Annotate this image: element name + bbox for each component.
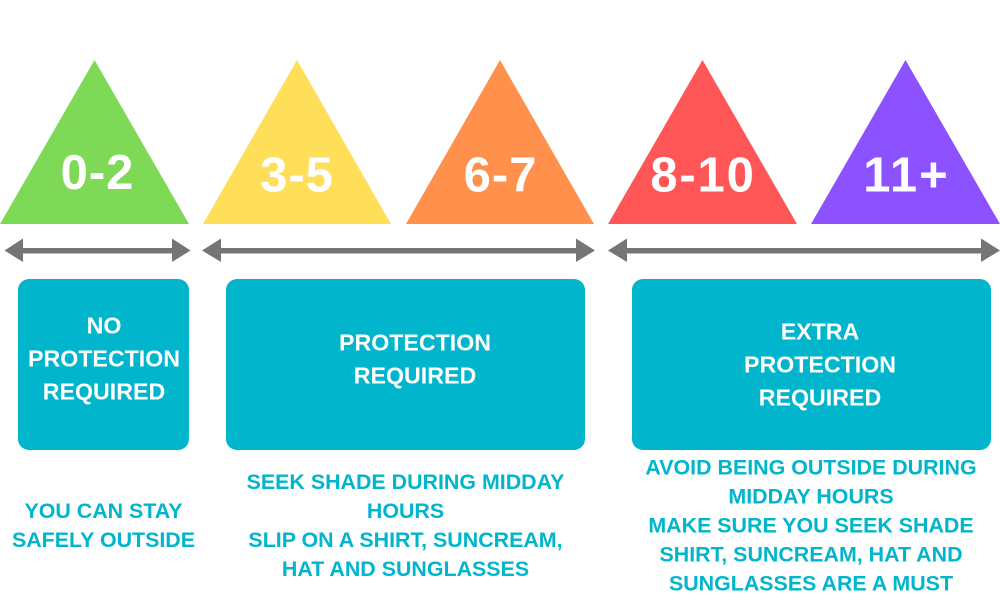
panel: extra protection required: REQUIRED bbox=[759, 384, 881, 410]
panel: no protection required: PROTECTION bbox=[28, 345, 180, 371]
text: advice for moderate UV bbox=[247, 470, 564, 581]
triangle: UV 11+ bbox=[811, 60, 1000, 224]
text: advice for low UV: SAFELY OUTSIDE bbox=[12, 528, 195, 552]
arrow: range 3-7 bbox=[202, 238, 595, 262]
arrow: range 0-2 bbox=[4, 238, 190, 262]
text: advice for high UV: SHIRT, SUNCREAM, HAT AND bbox=[659, 542, 963, 566]
text: advice for high UV bbox=[645, 456, 977, 596]
triangle: UV 8-10 bbox=[608, 60, 797, 224]
text: advice for low UV bbox=[12, 499, 195, 552]
arrow: range 8-11+ bbox=[608, 238, 1000, 262]
text: advice for high UV: MIDDAY HOURS bbox=[728, 484, 894, 508]
panel: protection required: REQUIRED bbox=[354, 362, 476, 388]
text: advice for moderate UV: HAT AND SUNGLASSES bbox=[282, 557, 529, 581]
text: advice for moderate UV: SEEK SHADE DURING MIDDAY bbox=[247, 470, 564, 494]
text: advice for moderate UV: SLIP ON A SHIRT, SUNCREAM, bbox=[248, 528, 563, 552]
triangle: UV 3-5: 3-5 bbox=[260, 148, 334, 202]
triangle: UV 11+: 11+ bbox=[863, 148, 950, 202]
text: advice for high UV: MAKE SURE YOU SEEK SHADE bbox=[648, 514, 974, 538]
text: advice for moderate UV: HOURS bbox=[367, 499, 444, 523]
triangle: UV 3-5 bbox=[203, 60, 391, 224]
panel: no protection required: REQUIRED bbox=[43, 378, 165, 404]
triangle: UV 6-7: 6-7 bbox=[464, 148, 537, 202]
text: advice for high UV: AVOID BEING OUTSIDE DURING bbox=[645, 456, 977, 480]
triangle: UV 8-10: 8-10 bbox=[650, 148, 756, 202]
text: advice for high UV: SUNGLASSES ARE A MUST bbox=[669, 572, 953, 596]
panel: extra protection required: EXTRA bbox=[781, 318, 860, 344]
panel: no protection required: NO bbox=[87, 312, 121, 338]
panel: protection required bbox=[226, 279, 585, 450]
panel: extra protection required: PROTECTION bbox=[744, 351, 896, 377]
triangle: UV 0-2: 0-2 bbox=[61, 146, 134, 200]
panel: protection required: PROTECTION bbox=[339, 329, 491, 355]
panel: extra protection required bbox=[632, 279, 991, 450]
triangle: UV 6-7 bbox=[406, 60, 594, 224]
panel: no protection required bbox=[18, 279, 189, 450]
text: advice for low UV: YOU CAN STAY bbox=[24, 499, 183, 523]
triangle: UV 0-2 bbox=[0, 60, 189, 224]
